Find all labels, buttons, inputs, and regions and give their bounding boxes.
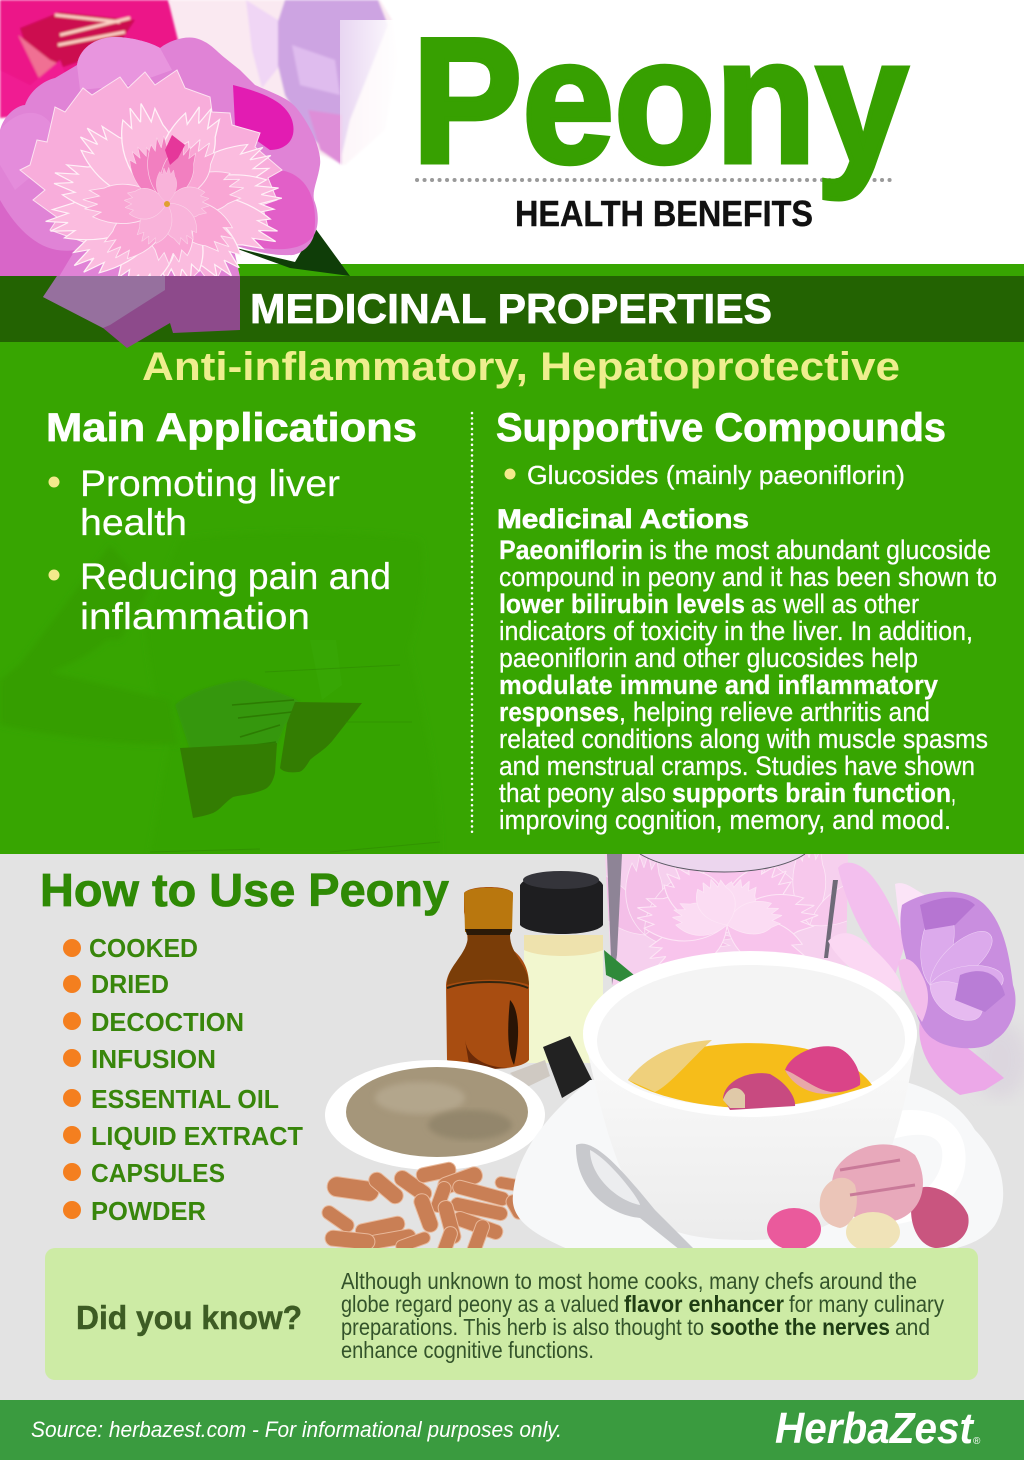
- pink centre petals: [20, 70, 286, 297]
- image: tea cup, oils, capsules and peony still life: [319, 843, 1024, 1261]
- list: how to use forms: COOKED: [89, 933, 198, 963]
- leaf by jar: [604, 950, 634, 984]
- list: how to use forms: POWDER: [91, 1196, 206, 1226]
- title: Peony: Peony: [412, 1, 908, 200]
- text block: medicinal actions: lower bilirubin levels: [499, 589, 745, 619]
- glass jar with peony: [605, 854, 848, 985]
- callout heading: Did you know?: [76, 1299, 302, 1336]
- callout text: enhance cognitive functions.: [341, 1337, 594, 1363]
- petals seen through band: [43, 276, 240, 348]
- how to use panel background: [0, 854, 1024, 1400]
- outer magenta petals: [0, 37, 320, 285]
- deep pink peony: [0, 0, 184, 118]
- footer: [0, 1400, 1024, 1460]
- text block: medicinal actions: improving cognition, memory, and mood.: [499, 805, 951, 835]
- text block: medicinal actions: related conditions along with muscle spasms: [499, 724, 988, 754]
- capsules: [322, 1162, 520, 1248]
- callout text: [341, 1268, 944, 1363]
- heading: medicinal actions: Medicinal Actions: [497, 504, 749, 534]
- purple peony: [828, 863, 1024, 1098]
- logo: HerbaZest: HerbaZest: [775, 1404, 975, 1453]
- text block: medicinal actions: ,: [951, 778, 956, 808]
- text block: medicinal actions: and menstrual cramps. Studies have shown: [499, 751, 975, 781]
- bullet: promoting liver health: health: [80, 502, 187, 543]
- bullet: glucosides: Glucosides (mainly paeoniflorin): [527, 460, 905, 490]
- heading: supportive compounds: Supportive Compounds: [496, 406, 946, 450]
- bullet: reducing pain and inflammation: [48, 556, 391, 637]
- list: how to use forms: DRIED: [91, 969, 169, 999]
- text block: medicinal actions: as well as other: [751, 589, 919, 619]
- list: how to use forms: LIQUID EXTRACT: [91, 1121, 303, 1151]
- bullet: promoting liver health: Promoting liver: [80, 463, 340, 504]
- green medicinal panel background: [0, 264, 1024, 854]
- dropper: [510, 1036, 592, 1098]
- heading: how to use peony: How to Use Peony: [40, 864, 449, 916]
- text block: medicinal actions: Paeoniflorin: [499, 535, 643, 565]
- bullet: reducing pain and inflammation: inflammation: [80, 596, 310, 637]
- image: peony flowers: [0, 0, 402, 297]
- list: how to use forms: DECOCTION: [91, 1007, 244, 1037]
- text block: medicinal actions: responses: [499, 697, 619, 727]
- text block: medicinal actions: is the most abundant glucoside: [649, 535, 991, 565]
- column: main applications: [46, 406, 417, 637]
- spoon: [576, 1144, 695, 1250]
- callout text: soothe the nerves: [710, 1314, 890, 1340]
- callout text: and: [895, 1314, 930, 1340]
- text block: medicinal actions: compound in peony and it has been shown to: [499, 562, 997, 592]
- list: how to use forms: INFUSION: [91, 1044, 216, 1074]
- list: how to use forms: ESSENTIAL OIL: [91, 1084, 279, 1114]
- text block: medicinal actions: modulate immune and inflammatory: [499, 670, 938, 700]
- callout text: globe regard peony as a valued: [341, 1291, 619, 1317]
- list: how to use forms: CAPSULES: [91, 1158, 225, 1188]
- plate of powder: [325, 1060, 545, 1170]
- heading: medicinal properties: MEDICINAL PROPERTIES: [250, 285, 772, 332]
- text block: medicinal actions: , helping relieve arthritis and: [619, 697, 930, 727]
- clear oil vial: [520, 871, 603, 1063]
- subheading: anti-inflammatory, hepatoprotective: Anti-inflammatory, Hepatoprotective: [142, 345, 900, 389]
- heading: main applications: Main Applications: [46, 406, 417, 450]
- text block: medicinal actions: indicators of toxicity in the liver. In addition,: [499, 616, 973, 646]
- callout text: preparations. This herb is also thought to: [341, 1314, 704, 1340]
- text block: medicinal actions: [499, 535, 997, 835]
- list: how to use forms: [63, 933, 303, 1226]
- text block: medicinal actions: paeoniflorin and other glucosides help: [499, 643, 918, 673]
- band: medicinal properties: [0, 276, 1024, 348]
- callout: did you know: [45, 1248, 978, 1380]
- dried peony buds: [767, 1144, 969, 1252]
- logo: HerbaZest: ®: [973, 1436, 981, 1447]
- image: body silhouette with liver: [150, 664, 440, 852]
- buds in tea: [723, 1046, 860, 1110]
- bullet: reducing pain and inflammation: Reducing pain and: [80, 556, 391, 597]
- text block: medicinal actions: that peony also: [499, 778, 666, 808]
- white fade over pale peony: [340, 20, 402, 170]
- callout text: flavor enhancer: [624, 1291, 784, 1317]
- callout text: for many culinary: [789, 1291, 944, 1317]
- saucer: [513, 1076, 1003, 1250]
- column: supportive compounds: [496, 406, 997, 835]
- callout text: Although unknown to most home cooks, many chefs around the: [341, 1268, 917, 1294]
- source note: Source: herbazest.com - For informational purposes only.: [31, 1417, 562, 1442]
- amber bottle: [446, 887, 529, 1070]
- leaf: [232, 228, 350, 276]
- text block: medicinal actions: supports brain function: [672, 778, 951, 808]
- bullet: promoting liver health: [48, 463, 340, 543]
- subtitle: health benefits: HEALTH BENEFITS: [515, 193, 813, 234]
- pale lilac peony: [168, 0, 398, 165]
- tea cup: [583, 951, 917, 1240]
